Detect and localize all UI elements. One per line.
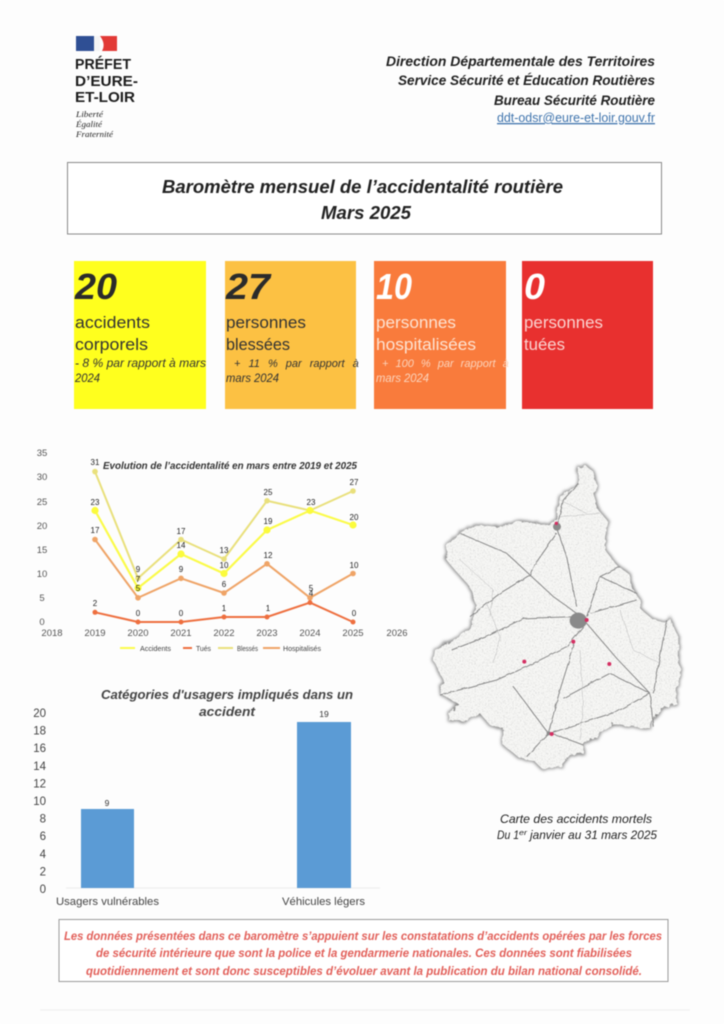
category labels [56, 896, 366, 908]
map towns [547, 523, 587, 735]
footer note [59, 920, 668, 982]
data labels: 2 [93, 599, 98, 608]
x axis labels: 2022 [213, 628, 235, 639]
panel: personnes blessées: personnes [226, 313, 306, 332]
legend: Accidents [140, 644, 171, 653]
series: blessés [92, 469, 356, 581]
bar values: 9 [105, 798, 110, 808]
y axis labels: 8 [40, 814, 46, 826]
x axis labels: 2021 [170, 628, 192, 639]
data labels: 20 [350, 513, 359, 522]
y axis labels: 16 [33, 743, 46, 755]
y axis labels: 14 [33, 761, 47, 773]
map caption: Carte des accidents mortels [500, 812, 652, 826]
motto [75, 109, 114, 139]
data labels: 0 [179, 609, 184, 618]
subtitle: month: Mars 2025 [321, 203, 412, 223]
series: tués [92, 600, 356, 624]
bar values: 19 [319, 709, 329, 719]
footer note: Les données présentées dans ce baromètre s’appuient sur les constatations d’accidents opérées par les forces [64, 931, 662, 943]
data labels: 23 [307, 498, 316, 507]
map caption [497, 812, 657, 842]
y axis labels [37, 448, 47, 628]
panel: personnes blessées: mars 2024 [226, 373, 279, 385]
header: issuing service [386, 53, 656, 125]
map caption: janvier au 31 mars 2025 [528, 828, 657, 842]
header: issuing service: ddt-odsr@eure-et-loir.gouv.fr [497, 110, 656, 125]
map roads [440, 483, 667, 757]
y axis labels: 35 [37, 448, 47, 459]
y axis labels: 18 [33, 726, 46, 738]
y axis labels: 20 [37, 521, 47, 532]
chart title: accident [199, 705, 256, 719]
motto: Liberté [75, 109, 104, 119]
data labels: 27 [350, 478, 359, 487]
panel: personnes hospitalisées: 10 [376, 266, 412, 307]
legend: Blessés [237, 644, 258, 653]
y axis labels [33, 708, 47, 896]
data labels: 10 [350, 561, 359, 570]
panel: accidents corporels: corporels [75, 335, 148, 354]
x axis labels: 2019 [84, 628, 106, 639]
data labels: 17 [91, 526, 100, 535]
logo wordmark [75, 56, 138, 106]
chart title [101, 688, 353, 719]
chart title: Catégories d'usagers impliqués dans un [101, 688, 353, 702]
legend: Hospitalisés [283, 644, 321, 653]
data labels: 9 [136, 565, 141, 574]
header: issuing service: Bureau Sécurité Routière [494, 92, 655, 108]
bar: véhicules légers [297, 722, 351, 888]
panel: personnes tuées [522, 261, 653, 409]
category labels: Véhicules légers [282, 896, 366, 908]
y axis labels: 30 [37, 472, 47, 483]
title: Baromètre mensuel de l’accidentalité routière [162, 177, 563, 197]
series: accidents [91, 507, 357, 592]
legend: Tués [196, 644, 211, 653]
footer note: de sécurité intérieure que sont la police et la gendarmerie nationales. Ces données sont fiabilisées [96, 948, 632, 960]
header: issuing service: Direction Départementale des Territoires [386, 53, 655, 69]
motto: Égalité [75, 119, 103, 129]
data labels: 10 [220, 561, 229, 570]
y axis labels: 10 [33, 796, 46, 808]
bar chart: catégories d'usagers [33, 688, 380, 908]
x axis labels: 2020 [127, 628, 149, 639]
panel: personnes blessées: + 11 % par rapport à [234, 358, 359, 370]
y axis labels: 12 [33, 778, 46, 790]
data labels: 17 [177, 527, 186, 536]
logo wordmark: PRÉFET [75, 56, 131, 73]
panel: personnes blessées [225, 261, 359, 409]
data labels: 19 [264, 517, 273, 526]
panel: accidents corporels [74, 261, 206, 409]
data labels: 0 [136, 609, 141, 618]
map caption: Du 1 [497, 828, 519, 842]
data labels: 23 [91, 498, 100, 507]
icon: French flag [76, 36, 117, 51]
logo wordmark: D’EURE- [75, 73, 138, 90]
x axis labels: 2026 [386, 628, 408, 639]
panel: personnes tuées: tuées [524, 335, 565, 354]
panel: accidents corporels: 2024 [74, 373, 100, 385]
motto: Fraternité [75, 129, 114, 139]
x axis labels: 2018 [41, 628, 63, 639]
data labels: 5 [309, 584, 314, 593]
legend [120, 644, 321, 653]
x axis labels: 2025 [342, 628, 364, 639]
panel: accidents corporels: accidents [75, 313, 150, 332]
data labels: 6 [222, 580, 227, 589]
y axis labels: 20 [33, 708, 46, 720]
map land [433, 465, 682, 768]
panel: personnes hospitalisées: mars 2024 [376, 373, 429, 385]
y axis labels: 10 [37, 569, 47, 580]
category labels: Usagers vulnérables [56, 896, 160, 908]
fatal accident markers [522, 522, 611, 736]
panel: accidents corporels: 20 [74, 266, 117, 307]
x axis labels: 2023 [256, 628, 278, 639]
y axis labels: 6 [40, 831, 46, 843]
panel: personnes hospitalisées: + 100 % par rapport à [382, 358, 509, 370]
x axis labels [41, 628, 408, 639]
y axis labels: 2 [40, 866, 46, 878]
data labels: 25 [264, 488, 273, 497]
panel: accidents corporels: - 8 % par rapport à mars [75, 358, 206, 370]
map caption: er [519, 828, 528, 837]
data labels: 9 [179, 565, 184, 574]
panel: personnes blessées: blessées [226, 335, 290, 354]
panel: personnes hospitalisées [374, 261, 509, 409]
data labels [91, 458, 359, 618]
data labels: 13 [220, 546, 229, 555]
series: hospitalisés [92, 537, 356, 601]
x axis labels: 2024 [299, 628, 321, 639]
y axis labels: 15 [37, 545, 47, 556]
data labels: 5 [136, 584, 141, 593]
y axis labels: 5 [39, 593, 45, 604]
data labels: 4 [309, 589, 314, 598]
bar values [105, 709, 329, 808]
panel: personnes hospitalisées: hospitalisées [376, 335, 476, 354]
data labels: 0 [352, 609, 357, 618]
data labels: 7 [136, 575, 141, 584]
logo wordmark: ET-LOIR [75, 89, 135, 106]
header: issuing service: Service Sécurité et Éducation Routières [398, 72, 655, 88]
data labels: 1 [222, 604, 227, 613]
data labels: 1 [266, 604, 271, 613]
map: Eure-et-Loir fatal accidents [430, 462, 684, 772]
y axis labels: 25 [37, 497, 47, 508]
axis baseline [66, 887, 380, 889]
data labels: 14 [177, 541, 186, 550]
panel: personnes hospitalisées: personnes [376, 313, 456, 332]
line chart: évolution de l'accidentalité [37, 448, 408, 653]
logo: Préfet d'Eure-et-Loir [75, 36, 138, 139]
data labels: 31 [91, 458, 100, 467]
panel: personnes tuées: 0 [524, 266, 545, 307]
chart title: Evolution de l’accidentalité en mars entre 2019 et 2025 [103, 461, 357, 472]
map texture [434, 467, 680, 768]
bar: usagers vulnérables [81, 809, 134, 888]
panel: personnes blessées: 27 [225, 266, 272, 307]
data labels: 12 [264, 551, 273, 560]
footer note: quotidiennement et sont donc susceptibles d’évoluer avant la publication du bilan national consolidé. [86, 966, 642, 978]
title box [68, 162, 662, 234]
y axis labels: 0 [40, 884, 46, 896]
map shadow [433, 465, 682, 768]
y axis labels: 0 [39, 617, 45, 628]
y axis labels: 4 [40, 849, 47, 861]
panel: personnes tuées: personnes [524, 313, 603, 332]
